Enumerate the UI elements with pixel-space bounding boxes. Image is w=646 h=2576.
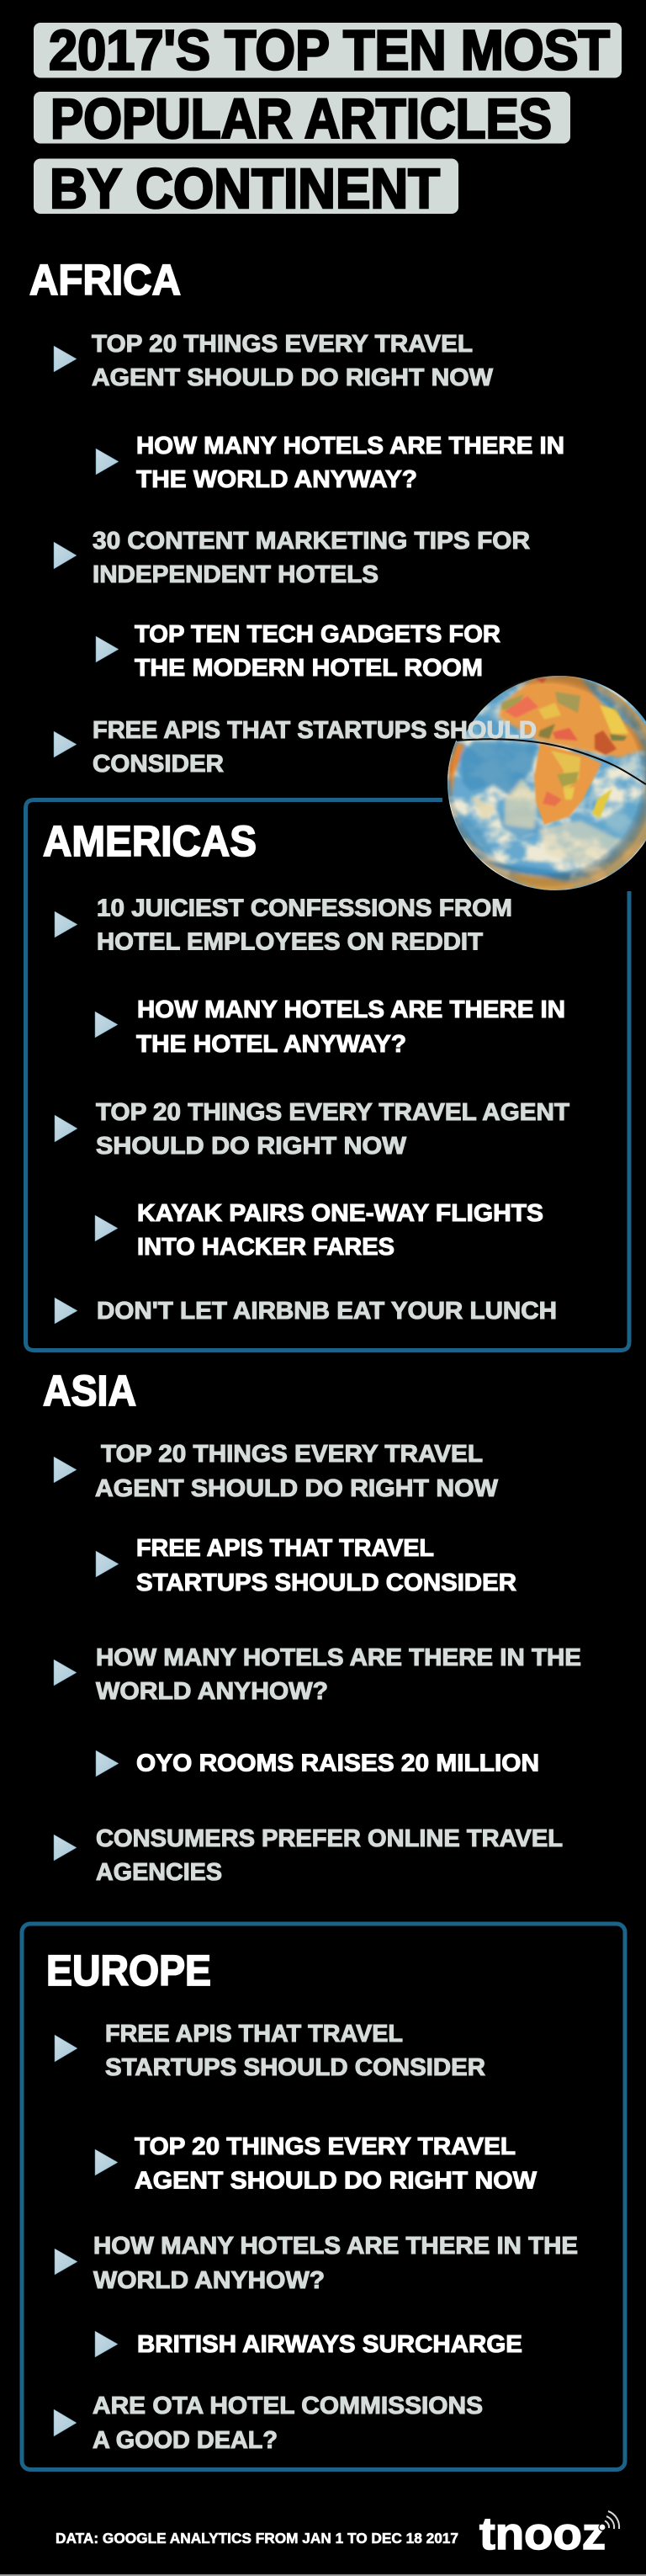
article text: THE WORLD ANYWAY? xyxy=(136,466,417,493)
title line 1: 2017'S TOP TEN MOST xyxy=(49,19,610,82)
article text: ARE OTA HOTEL COMMISSIONS xyxy=(93,2393,483,2419)
article item xyxy=(96,1535,516,1596)
article text: INTO HACKER FARES xyxy=(137,1234,394,1261)
article text: STARTUPS SHOULD CONSIDER xyxy=(105,2054,485,2081)
article text: SHOULD DO RIGHT NOW xyxy=(96,1133,407,1160)
icon: arrow xyxy=(55,911,77,937)
article text: OYO ROOMS RAISES 20 MILLION xyxy=(136,1750,539,1777)
article text: HOTEL EMPLOYEES ON REDDIT xyxy=(97,929,483,956)
article text xyxy=(96,1099,569,1160)
article text: FREE APIS THAT TRAVEL xyxy=(105,2021,403,2048)
icon: arrow xyxy=(96,1750,119,1777)
article text xyxy=(137,1200,543,1261)
icon: arrow xyxy=(55,2035,77,2062)
article text: TOP TEN TECH GADGETS FOR xyxy=(135,621,500,648)
title xyxy=(34,19,622,220)
icon: arrow xyxy=(54,346,77,372)
heading: europe: EUROPE xyxy=(46,1947,211,1994)
article item xyxy=(95,2133,537,2195)
article text: WORLD ANYHOW? xyxy=(96,1678,328,1705)
article item xyxy=(95,1200,543,1261)
icon: arrow xyxy=(96,449,119,475)
article text: HOW MANY HOTELS ARE THERE IN THE xyxy=(93,2233,578,2260)
icon: globe xyxy=(446,673,646,892)
article item xyxy=(96,1750,539,1777)
heading: asia: ASIA xyxy=(43,1367,136,1415)
globe rim shading xyxy=(448,676,646,890)
article text: AGENT SHOULD DO RIGHT NOW xyxy=(92,364,494,391)
icon: arrow xyxy=(95,1012,118,1038)
article text: 30 CONTENT MARKETING TIPS FOR xyxy=(93,528,530,555)
icon: arrow xyxy=(54,1660,77,1686)
article text: TOP 20 THINGS EVERY TRAVEL xyxy=(101,1441,483,1468)
heading: americas: AMERICAS xyxy=(43,817,257,865)
icon: arrow xyxy=(54,2409,77,2436)
article item xyxy=(54,331,494,391)
article text: DON'T LET AIRBNB EAT YOUR LUNCH xyxy=(97,1298,557,1325)
article text xyxy=(96,1825,563,1886)
article text: HOW MANY HOTELS ARE THERE IN xyxy=(136,433,564,459)
icon: arrow xyxy=(96,1551,119,1577)
article text xyxy=(136,1535,516,1596)
article text: INDEPENDENT HOTELS xyxy=(93,561,379,588)
article item xyxy=(54,1825,563,1886)
article text: FREE APIS THAT STARTUPS SHOULD xyxy=(93,717,537,744)
title line 3: BY CONTINENT xyxy=(50,157,440,220)
icon: arrow xyxy=(54,1457,77,1483)
article text: THE MODERN HOTEL ROOM xyxy=(135,655,483,682)
article text xyxy=(93,2393,483,2454)
article item xyxy=(54,717,537,778)
article text xyxy=(92,331,494,391)
article text xyxy=(135,621,500,682)
article item xyxy=(54,1441,499,1502)
article text xyxy=(96,1644,581,1705)
panel: americas border xyxy=(25,799,629,1350)
article text: WORLD ANYHOW? xyxy=(93,2267,325,2294)
globe upper hemisphere xyxy=(463,676,646,783)
article item xyxy=(54,1644,581,1705)
article item xyxy=(54,528,530,588)
article text: AGENT SHOULD DO RIGHT NOW xyxy=(95,1475,499,1502)
article text: 10 JUICIEST CONFESSIONS FROM xyxy=(97,895,512,922)
icon: arrow xyxy=(96,636,119,662)
article text: AGENCIES xyxy=(96,1859,222,1886)
logo: tnooz: tnooz xyxy=(479,2509,606,2559)
article text xyxy=(136,433,564,493)
icon: arrow xyxy=(54,542,77,569)
article text xyxy=(93,528,530,588)
article item xyxy=(55,2021,485,2081)
title line 2: POPULAR ARTICLES xyxy=(50,88,552,151)
article item xyxy=(55,895,512,956)
icon: arrow xyxy=(55,1115,77,1142)
article text: AGENT SHOULD DO RIGHT NOW xyxy=(135,2168,537,2195)
article text xyxy=(136,996,565,1058)
panel: americas xyxy=(43,817,569,1325)
article text: STARTUPS SHOULD CONSIDER xyxy=(136,1570,516,1596)
article text xyxy=(105,2021,485,2081)
article text: CONSUMERS PREFER ONLINE TRAVEL xyxy=(96,1825,563,1852)
icon: arrow xyxy=(54,1835,77,1861)
icon: arrow xyxy=(55,2249,77,2275)
article item xyxy=(96,621,500,682)
article text: HOW MANY HOTELS ARE THERE IN THE xyxy=(96,1644,581,1671)
article item xyxy=(96,433,564,493)
article text: THE HOTEL ANYWAY? xyxy=(136,1031,406,1058)
article text: BRITISH AIRWAYS SURCHARGE xyxy=(137,2331,522,2358)
article text xyxy=(93,2233,578,2294)
panel: africa xyxy=(29,256,564,778)
article item xyxy=(54,2393,483,2454)
article text: TOP 20 THINGS EVERY TRAVEL AGENT xyxy=(96,1099,569,1126)
article text: CONSIDER xyxy=(93,751,224,778)
article text: TOP 20 THINGS EVERY TRAVEL xyxy=(135,2133,516,2160)
article item xyxy=(95,2331,522,2358)
article item xyxy=(55,2233,578,2294)
article text xyxy=(97,895,512,956)
article item xyxy=(55,1298,557,1325)
panel: europe border xyxy=(22,1924,625,2469)
article text xyxy=(95,1441,499,1502)
article item xyxy=(55,1099,569,1160)
icon: arrow xyxy=(95,2331,118,2357)
icon: arrow xyxy=(55,1298,77,1324)
article text: KAYAK PAIRS ONE-WAY FLIGHTS xyxy=(137,1200,543,1227)
footer data source: DATA: GOOGLE ANALYTICS FROM JAN 1 TO DEC 18 2017 xyxy=(56,2530,458,2547)
icon: arrow xyxy=(54,731,77,757)
panel: europe xyxy=(22,1924,625,2469)
icon: arrow xyxy=(95,2149,118,2175)
article text: TOP 20 THINGS EVERY TRAVEL xyxy=(92,331,473,358)
article text: A GOOD DEAL? xyxy=(93,2427,278,2454)
article text: FREE APIS THAT TRAVEL xyxy=(136,1535,434,1562)
globe equator line xyxy=(457,739,646,784)
globe lower hemisphere xyxy=(447,740,646,890)
article item xyxy=(95,996,565,1058)
article text: HOW MANY HOTELS ARE THERE IN xyxy=(137,996,565,1023)
article text xyxy=(93,717,537,778)
icon: arrow xyxy=(95,1215,118,1241)
article text xyxy=(135,2133,537,2195)
heading: africa: AFRICA xyxy=(29,256,181,304)
panel: asia xyxy=(43,1367,581,1886)
